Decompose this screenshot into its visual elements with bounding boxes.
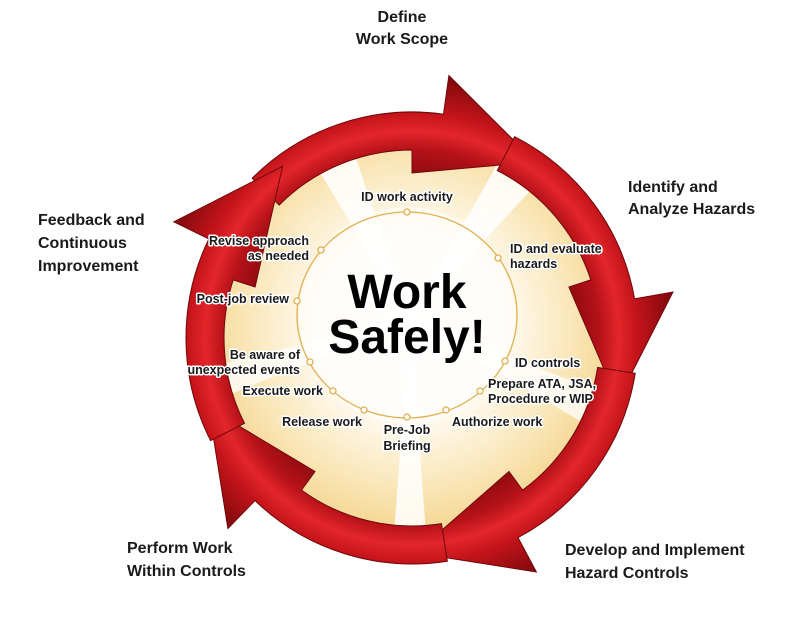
center title: Safely! [328,311,486,364]
arrows ring [113,76,700,628]
heading: define work scope: Work Scope [356,31,448,48]
heading: develop controls: Hazard Controls [565,565,689,582]
step labels: Execute work [242,384,323,398]
heading: identify hazards: Analyze Hazards [628,201,755,218]
step labels: ID and evaluate [510,242,602,256]
center title [328,266,486,364]
gold circle with dots [294,209,517,420]
arrow: develop controls [390,352,696,623]
step labels: Prepare ATA, JSA, [488,377,596,391]
step labels: Authorize work [452,415,542,429]
step labels: ID controls [515,356,580,370]
step labels: as needed [248,249,309,263]
heading: feedback: Continuous [38,235,127,252]
arrow: identify hazards [489,105,700,414]
arrow: feedback [113,140,324,449]
heading: perform work: Perform Work [127,540,233,557]
step labels: unexpected events [187,363,300,377]
step labels: ID work activity [361,190,453,204]
heading: feedback: Feedback and [38,212,145,229]
arrow: perform work [158,373,463,628]
center title: Work [347,266,467,319]
step labels [187,190,602,453]
heading: perform work: Within Controls [127,563,246,580]
step labels: Pre-Job [384,423,431,437]
heading: develop controls: Develop and Implement [565,542,745,559]
heading: identify hazards: Identify and [628,179,718,196]
background glow [195,125,612,560]
heading: feedback: Improvement [38,258,139,275]
step labels: hazards [510,257,557,271]
heading: define work scope: Define [378,9,427,26]
step labels: Post-job review [197,292,289,306]
step labels: Be aware of [230,348,301,362]
step labels: Release work [282,415,362,429]
step labels: Revise approach [209,234,309,248]
step labels: Procedure or WIP [488,392,593,406]
arrow: define work scope [252,76,535,205]
step labels: Briefing [383,439,431,453]
